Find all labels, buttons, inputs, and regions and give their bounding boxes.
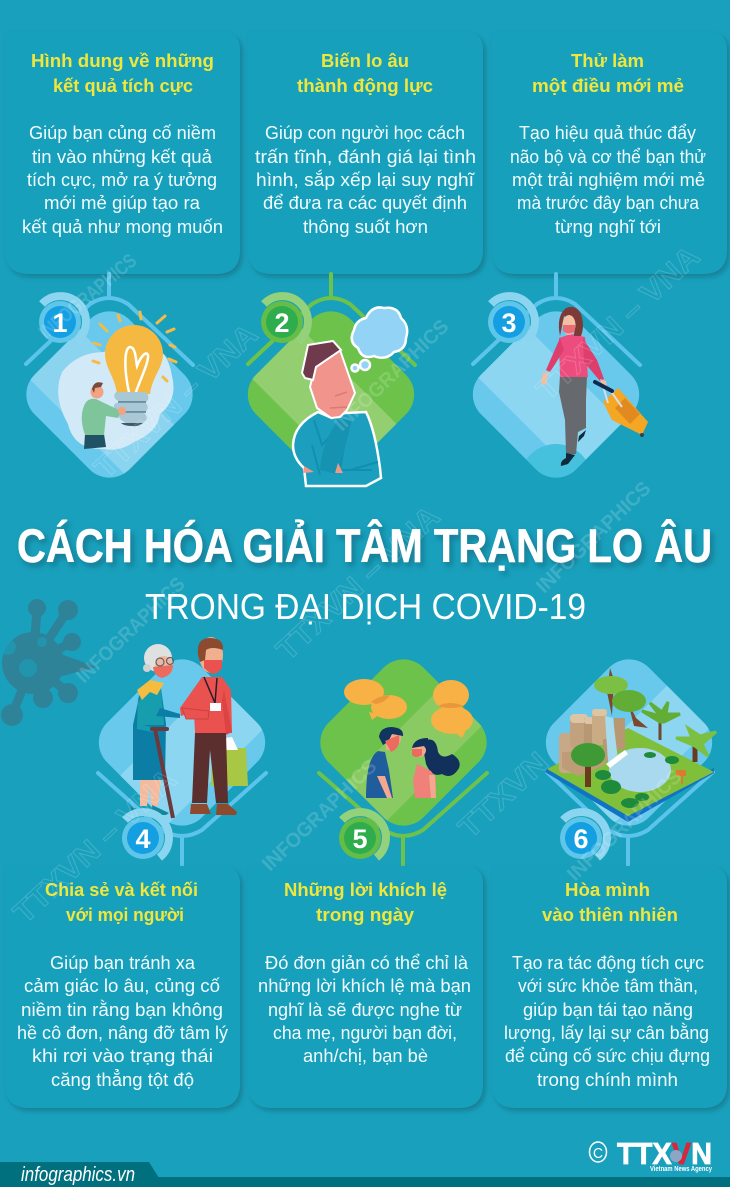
watermarks: INFOGRAPHICS xyxy=(258,756,381,876)
badge 2: 2 xyxy=(274,308,290,338)
text: card 2: trấn tĩnh, đánh giá lại tình xyxy=(255,147,476,167)
badge 6 xyxy=(560,812,607,859)
heading: card 3: Thử làm xyxy=(571,50,644,71)
text: card 5: cha mẹ, người bạn đời, xyxy=(273,1023,457,1043)
text: card 4: cảm giác lo âu, củng cố xyxy=(24,976,220,996)
text: card 3: não bộ và cơ thể bạn thử xyxy=(510,147,706,167)
text: card 6: để củng cố sức chịu đựng xyxy=(505,1046,710,1066)
watermarks: INFOGRAPHICS xyxy=(330,316,453,436)
heading: card 4: Chia sẻ và kết nối xyxy=(45,879,198,900)
heading: card 5 xyxy=(284,879,447,925)
text: card 4: khi rơi vào trạng thái xyxy=(32,1046,213,1066)
rocks and waterfall xyxy=(559,709,625,776)
panel: card 2 xyxy=(248,32,483,274)
illustration 1: light bulb xyxy=(24,272,195,478)
heading: card 4 xyxy=(45,879,198,925)
heading: card 1 xyxy=(31,50,214,96)
text: card 4 xyxy=(17,953,228,1090)
badge 6: 6 xyxy=(573,824,589,854)
panel: card 3 xyxy=(492,32,727,274)
text: card 1: tin vào những kết quả xyxy=(32,147,213,167)
text: card 1: Giúp bạn củng cố niềm xyxy=(29,123,216,143)
watermarks: INFOGRAPHICS xyxy=(532,478,655,598)
heading: card 2: thành động lực xyxy=(297,75,433,96)
panel: card 1 xyxy=(5,32,240,274)
text: card 4: niềm tin rằng bạn không xyxy=(21,999,223,1020)
title xyxy=(17,519,712,627)
text: card 3: từng nghĩ tới xyxy=(555,217,661,237)
text: card 3 xyxy=(510,123,706,237)
virus silhouette xyxy=(0,599,97,726)
heading: card 2 xyxy=(297,50,433,96)
text: card 1: tích cực, mở ra ý tưởng xyxy=(27,170,217,190)
watermarks: TTXVN – VNA xyxy=(88,318,264,485)
heading: card 3 xyxy=(532,50,684,96)
title: TRONG ĐẠI DỊCH COVID-19 xyxy=(145,586,586,627)
badge 4 xyxy=(122,812,169,859)
illustration 2: thinking man xyxy=(246,272,418,488)
watermarks: TTXVN – VNA xyxy=(270,500,446,667)
text: card 6: với sức khỏe tâm thần, xyxy=(518,976,698,996)
logo: TTXVN: Vietnam News Agency xyxy=(650,1166,712,1173)
text: card 2: hình, sắp xếp lại suy nghĩ xyxy=(256,169,475,190)
watermarks: INFOGRAPHICS xyxy=(563,766,686,886)
heading: card 6: Hòa mình xyxy=(565,879,650,900)
text: card 6: lượng, lấy lại sự cân bằng xyxy=(504,1022,709,1043)
heading: card 6: vào thiên nhiên xyxy=(542,904,678,925)
badge 5: 5 xyxy=(352,824,368,854)
heading: card 2: Biến lo âu xyxy=(321,50,409,71)
footer bar xyxy=(0,1162,730,1187)
text: card 5: những lời khích lệ mà bạn xyxy=(258,976,471,996)
panel: card 5 xyxy=(248,866,483,1108)
text: card 4: Giúp bạn tránh xa xyxy=(50,953,196,973)
speech bubbles xyxy=(344,679,473,738)
panel: card 4 xyxy=(5,866,240,1108)
heading: card 5: Những lời khích lệ xyxy=(284,879,447,900)
text: card 4: hề cô đơn, nâng đỡ tâm lý xyxy=(17,1023,228,1043)
text: card 5: anh/chị, bạn bè xyxy=(303,1046,428,1066)
heading: card 1: Hình dung về những xyxy=(31,50,214,71)
badge 2 xyxy=(261,296,308,343)
text: card 6 xyxy=(504,953,710,1090)
logo: TTXVN: C xyxy=(593,1145,603,1162)
text: card 5: nghĩ là sẽ được nghe từ xyxy=(268,1000,462,1020)
illustration 4: elderly woman and man xyxy=(96,637,268,866)
text: card 3: mà trước đây bạn chưa xyxy=(517,193,700,213)
text: card 1: mới mẻ giúp tạo ra xyxy=(44,193,201,213)
text: card 2: Giúp con người học cách xyxy=(265,123,465,143)
heading: card 4: với mọi người xyxy=(66,904,184,925)
heading: card 3: một điều mới mẻ xyxy=(532,75,684,96)
illustration 5: two people talking xyxy=(316,659,490,866)
text: card 5: Đó đơn giản có thể chỉ là xyxy=(265,953,469,973)
text: card 1: kết quả như mong muốn xyxy=(22,217,223,237)
text: card 1 xyxy=(22,123,223,237)
watermarks: TTXVN – VNA xyxy=(7,763,183,930)
text: card 2 xyxy=(255,123,476,237)
text: card 6: Tạo ra tác động tích cực xyxy=(512,953,704,973)
text: card 6: trong chính mình xyxy=(537,1070,678,1090)
badge 1 xyxy=(39,296,86,343)
text: card 3: một trải nghiệm mới mẻ xyxy=(512,170,705,190)
badge 3 xyxy=(488,296,535,343)
text: card 2: thông suốt hơn xyxy=(303,217,428,237)
heading: card 1: kết quả tích cực xyxy=(53,75,193,96)
text: card 4: căng thẳng tột độ xyxy=(51,1069,194,1090)
watermarks: INFOGRAPHICS xyxy=(35,250,141,344)
text: card 5 xyxy=(258,953,471,1066)
text: card 3: Tạo hiệu quả thúc đẩy xyxy=(519,123,696,143)
heading: card 6 xyxy=(542,879,678,925)
text: card 2: để đưa ra các quyết định xyxy=(263,193,467,213)
heading: card 5: trong ngày xyxy=(316,904,415,925)
logo: TTXVN: TTXVN xyxy=(617,1136,712,1171)
thought bubble xyxy=(352,307,407,372)
watermarks: TTXVN xyxy=(452,746,555,845)
illustration 6: nature island xyxy=(545,659,717,866)
illustration 3: woman with suitcase xyxy=(471,272,648,478)
badge 1: 1 xyxy=(52,308,68,338)
watermarks xyxy=(7,240,706,930)
watermarks: INFOGRAPHICS xyxy=(72,573,190,688)
badge 5 xyxy=(339,812,386,859)
text: card 6: giúp bạn tái tạo năng xyxy=(523,1000,693,1020)
website label: infographics.vn xyxy=(21,1164,135,1186)
badge 4: 4 xyxy=(135,824,151,854)
watermarks: TTXVN – VNA xyxy=(530,240,706,407)
badge 3: 3 xyxy=(501,308,517,338)
panel: card 6 xyxy=(492,866,727,1108)
